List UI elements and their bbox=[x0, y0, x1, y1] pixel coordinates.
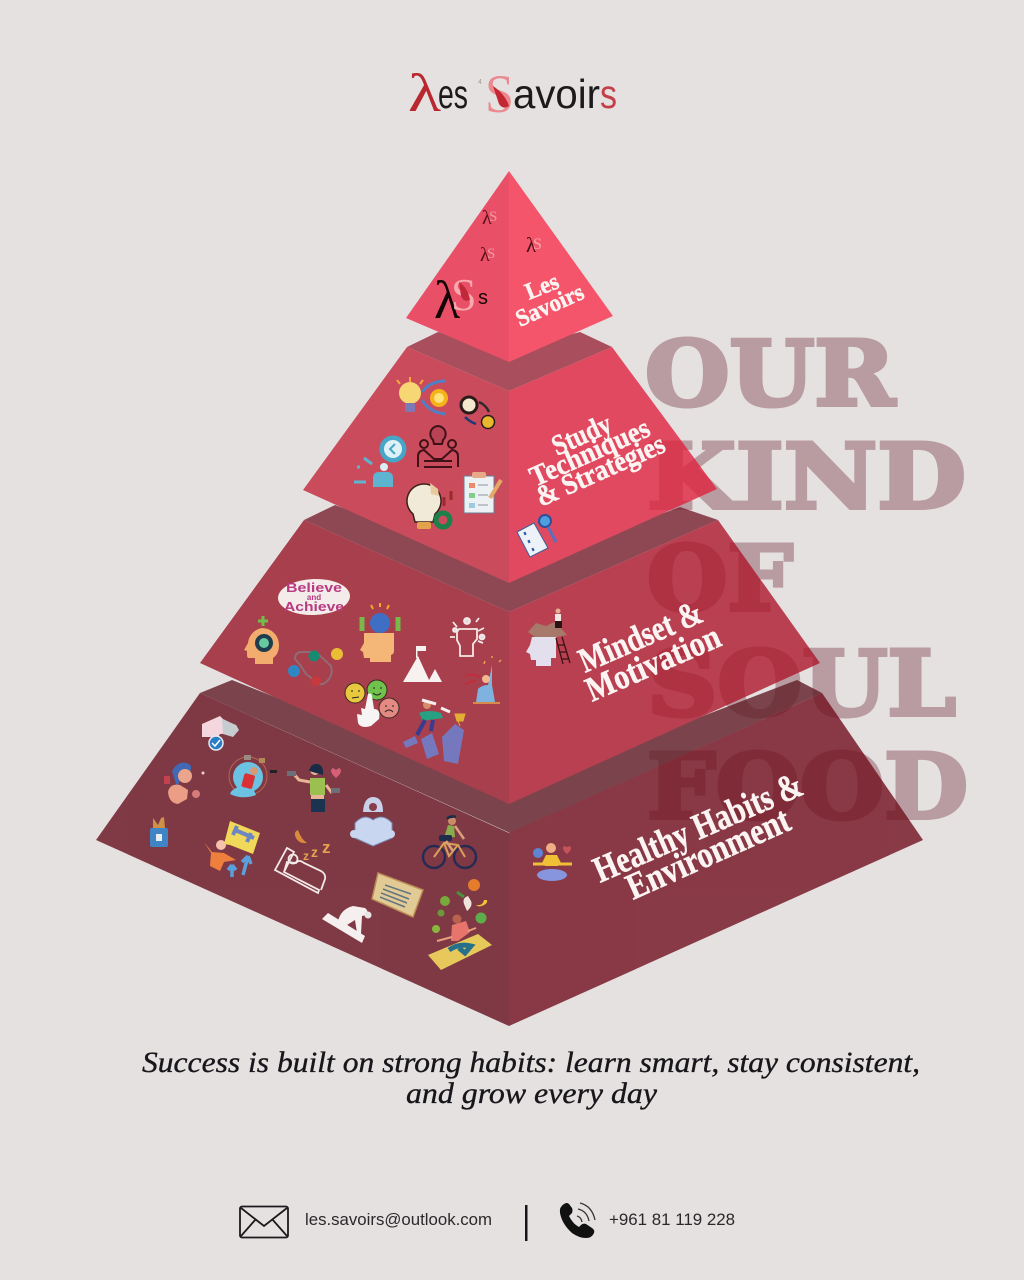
tagline bbox=[142, 1046, 920, 1110]
label: healthy habits and environment: Healthy Habits & bbox=[587, 764, 809, 891]
header logo: es bbox=[438, 71, 468, 117]
pyramid bbox=[96, 171, 923, 1026]
tier 4 right face bbox=[509, 693, 923, 1026]
icon: envelope bbox=[240, 1206, 288, 1238]
icon: bed with moon and zzz: z bbox=[311, 844, 318, 860]
icon: phone bbox=[560, 1203, 595, 1238]
label: study techniques and strategies: Study bbox=[547, 408, 617, 462]
icon: head with ladder bbox=[526, 608, 570, 666]
tagline: and grow every day bbox=[406, 1077, 658, 1110]
tier 2 left face bbox=[303, 347, 509, 583]
logo mark large: S bbox=[451, 269, 477, 320]
label: mindset and motivation: Motivation bbox=[580, 617, 726, 709]
icon: head with raised arrows bbox=[360, 603, 398, 662]
icon: person reading bbox=[350, 797, 395, 846]
phone number: +961 81 119 228 bbox=[609, 1210, 735, 1229]
icon: bed with moon and zzz bbox=[275, 830, 330, 893]
label: study techniques and strategies: Techniques bbox=[525, 412, 655, 493]
tier 3 left face bbox=[200, 520, 509, 804]
icon: meditating figure with heart bbox=[533, 843, 572, 881]
tier 1 left face bbox=[406, 171, 509, 362]
icon: believe and achieve sticker: Achieve bbox=[284, 599, 344, 614]
watermark: our kind of soul food: OUR bbox=[645, 321, 896, 427]
icon: woman with raised arm bbox=[465, 656, 501, 703]
icon: bed with moon and zzz: z bbox=[322, 838, 330, 857]
icon: hand washing bbox=[202, 716, 239, 750]
logo mark small 2 bbox=[480, 244, 495, 266]
email: les.savoirs@outlook.com bbox=[305, 1210, 492, 1229]
tier labels bbox=[512, 269, 809, 908]
logo mark small 1 bbox=[482, 207, 497, 229]
icon: yoga with healthy food bbox=[428, 879, 492, 970]
divider bbox=[525, 1205, 528, 1241]
tier 1 right face bbox=[509, 171, 613, 362]
header logo: S bbox=[485, 64, 514, 124]
icon: woman with dumbbells bbox=[287, 764, 341, 812]
icon: cup with toothbrush bbox=[150, 817, 168, 847]
tier 4 left face bbox=[96, 693, 509, 1026]
tier 3 band bbox=[304, 505, 718, 612]
icon: broken bulb, gear, arrows bbox=[407, 483, 451, 529]
icon: raised fist bbox=[450, 618, 484, 656]
icon: believe and achieve sticker: Believe bbox=[286, 580, 342, 595]
icon: bulb with arrows and sun bbox=[397, 377, 448, 414]
logo mark small 2: λ bbox=[480, 244, 490, 266]
tier 2 band bbox=[407, 332, 612, 391]
logo mark small 3: S bbox=[533, 236, 542, 253]
header logo bbox=[408, 63, 617, 124]
tier 1 logos bbox=[434, 207, 542, 330]
logo mark small 1: λ bbox=[482, 207, 492, 229]
icon: man with dumbbell speech bubble bbox=[204, 821, 260, 877]
icon: meditating man in circle bbox=[229, 755, 277, 797]
icon: mountain with flag bbox=[403, 646, 442, 682]
label: les savoirs: Savoirs bbox=[512, 279, 588, 332]
tier 4 band bbox=[200, 680, 822, 833]
label: mindset and motivation: Mindset & bbox=[573, 592, 708, 680]
watermark: our kind of soul food bbox=[645, 321, 968, 840]
icon: pointing hand bbox=[357, 693, 379, 727]
label: les savoirs: Les bbox=[522, 269, 563, 306]
icon: person stretching bbox=[322, 906, 372, 943]
icon: head with gear bbox=[244, 616, 279, 664]
logo mark small 3: λ bbox=[526, 233, 537, 257]
label: healthy habits and environment bbox=[587, 764, 809, 908]
logo mark large: s bbox=[478, 287, 488, 309]
icon: path with milestones bbox=[288, 648, 343, 686]
icon: gears and bulb bbox=[461, 397, 494, 428]
icon: clipboard checklist bbox=[464, 472, 501, 513]
icon: believe and achieve sticker: and bbox=[307, 593, 321, 602]
tier 2 icons bbox=[354, 377, 556, 557]
icon: climber on bars with trophy bbox=[403, 700, 465, 764]
header logo: 4 bbox=[478, 79, 482, 86]
icon: clock and person bbox=[354, 436, 406, 487]
icon: mood choice emojis bbox=[345, 680, 399, 727]
footer contact bbox=[240, 1203, 735, 1241]
icon: schedule board bbox=[372, 873, 423, 917]
watermark: our kind of soul food: OF bbox=[647, 526, 793, 632]
icon: cyclist bbox=[423, 816, 476, 868]
tier 3 right face bbox=[509, 520, 820, 804]
header logo: avoir bbox=[513, 71, 600, 117]
tier 2 right face bbox=[509, 347, 717, 583]
header logo: s bbox=[600, 71, 617, 117]
logo mark large: λ bbox=[434, 270, 460, 330]
tagline: Success is built on strong habits: learn smart, stay consistent, bbox=[142, 1046, 920, 1079]
icon: girl sitting bbox=[164, 763, 204, 804]
tier 3 icons bbox=[244, 578, 570, 764]
logo mark large bbox=[434, 269, 488, 330]
logo mark small 1: S bbox=[489, 209, 497, 225]
icon: teamwork bulb bbox=[418, 426, 458, 467]
icon: magnifier and list bbox=[517, 515, 556, 557]
icon: believe and achieve sticker bbox=[277, 578, 351, 616]
watermark: our kind of soul food: FOOD bbox=[647, 734, 968, 840]
logo mark small 2: S bbox=[487, 246, 495, 262]
header logo: λ bbox=[408, 63, 441, 123]
logo mark small 3 bbox=[526, 233, 542, 257]
icon: bed with moon and zzz: z bbox=[303, 849, 309, 863]
label: study techniques and strategies: & Strategies bbox=[531, 428, 670, 513]
tier 4 icons bbox=[150, 716, 572, 970]
label: healthy habits and environment: Environment bbox=[620, 799, 797, 908]
watermark: our kind of soul food: SOUL bbox=[647, 631, 956, 737]
watermark: our kind of soul food: KIND bbox=[647, 424, 966, 530]
